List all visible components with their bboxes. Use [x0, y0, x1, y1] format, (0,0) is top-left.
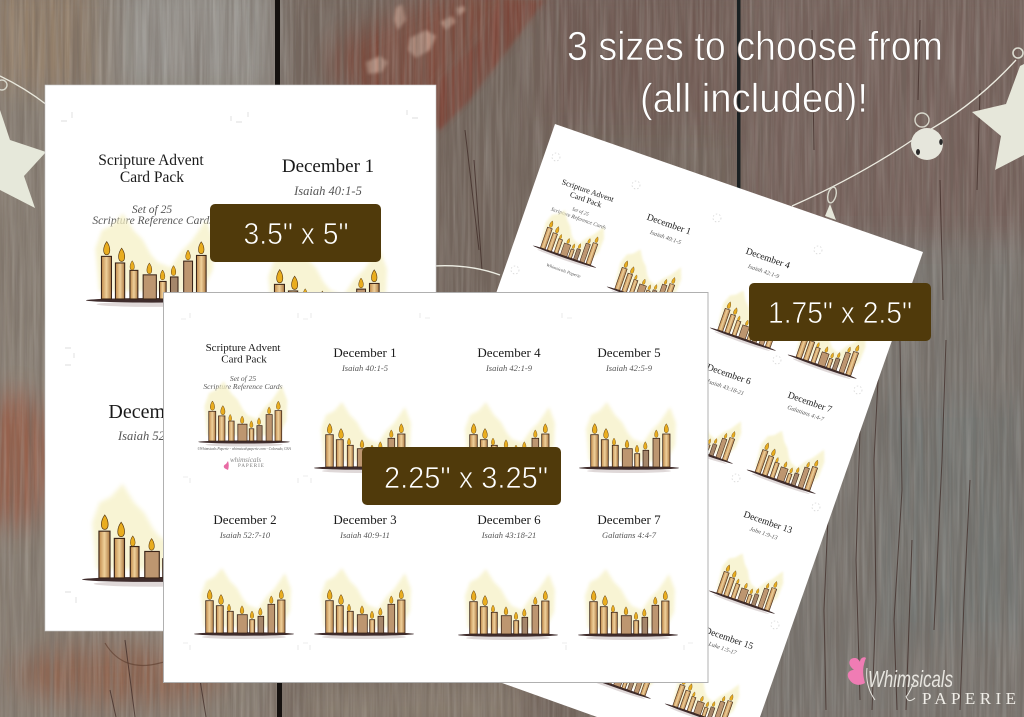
cover title: Scripture Advent: [206, 342, 280, 354]
rotated candle illustrations: [532, 204, 873, 717]
rotated cover text: Scripture Reference Cards: [550, 206, 607, 231]
scripture 2: Isaiah 52:7-10: [117, 429, 193, 443]
card labels row 2: December 3: [333, 512, 397, 527]
cover subtitle: Set of 25: [230, 374, 256, 383]
brand logo: Whimsicals: [868, 666, 953, 692]
brand logo: PAPERIE: [922, 689, 1016, 708]
size label: 3.5 x 5: [210, 204, 381, 262]
crop marks: [181, 313, 693, 650]
rotated card labels: Luke 1:5-17: [707, 641, 738, 657]
small logo: [224, 456, 265, 470]
card labels row 1: [333, 345, 661, 373]
title: 3 sizes to choose from: [567, 23, 943, 69]
rotated card labels: December 4: [744, 247, 791, 272]
card labels row 2: Isaiah 40:9-11: [339, 530, 390, 540]
cover title: Card Pack: [120, 169, 184, 186]
rotated cover text: Card Pack: [569, 190, 603, 209]
sheet: 2.25 x 3.25 inch cards: [164, 292, 708, 682]
candles cover: [86, 213, 218, 307]
card labels row 1: Isaiah 42:5-9: [605, 363, 653, 373]
candle illustrations: [194, 402, 679, 640]
card labels row 2: Galatians 4:4-7: [602, 530, 657, 540]
string and hanging ornaments: right: [792, 48, 1024, 220]
card labels row 2: December 2: [213, 512, 277, 527]
rotated card labels: December 1: [645, 213, 692, 238]
sheet: 1.75 x 2.5 inch cards (rotated): [376, 124, 923, 717]
cover subtitle: Set of 25: [132, 204, 172, 216]
small logo: whimsicals: [230, 456, 261, 464]
brand logo: [848, 657, 1016, 708]
rotated card labels: Isaiah 42:1-9: [746, 263, 780, 280]
rotated card labels: December 15: [703, 626, 755, 652]
card labels row 1: Isaiah 40:1-5: [341, 363, 388, 373]
rotated card labels: December 13: [742, 510, 794, 536]
card labels row 2: Isaiah 43:18-21: [481, 530, 536, 540]
rotated card labels: December 6: [705, 363, 752, 388]
card labels row 1: December 5: [597, 345, 661, 360]
rotated cover text: Scripture Advent: [561, 177, 616, 204]
rotated card labels: Isaiah 40:1-5: [648, 229, 682, 246]
candles cover: [198, 381, 290, 447]
candles december 1: [259, 241, 391, 335]
december 1 heading: December 1: [282, 156, 374, 177]
cover subtitle: Scripture Reference Cards: [203, 382, 283, 391]
rotated card labels: Galatians 4:4-7: [786, 404, 826, 423]
sheet: 3.5 x 5 inch cards: [45, 85, 436, 631]
rotated cover text: Whimsicals Paperie: [546, 262, 581, 279]
card labels row 1: Isaiah 42:1-9: [485, 363, 533, 373]
december 2 heading: December 2: [108, 401, 206, 423]
size label: 1.75 x 2.5: [749, 283, 931, 341]
card labels row 2: [213, 512, 661, 540]
crop marks: [61, 110, 418, 603]
cover title: Scripture Advent: [98, 152, 204, 169]
card labels row 1: December 4: [477, 345, 541, 360]
string and hanging ornaments: left: [0, 76, 47, 208]
size label: 3.5 x 5: 3.5" x 5": [244, 216, 348, 251]
rotated cover text: Set of 25: [571, 207, 590, 218]
cover title: Card Pack: [221, 354, 267, 366]
card labels row 2: December 7: [597, 512, 661, 527]
rotated card labels: Isaiah 43:18-21: [705, 378, 745, 397]
card labels row 1: December 1: [333, 345, 397, 360]
small logo: PAPERIE: [238, 464, 265, 469]
card labels row 2: December 6: [477, 512, 541, 527]
rotated card labels: [645, 213, 833, 657]
string between left and rotated sheets: [434, 266, 500, 275]
rotated card labels: December 7: [786, 391, 833, 416]
cover subtitle: Scripture Reference Cards: [92, 215, 214, 227]
size label: 1.75 x 2.5: 1.75" x 2.5": [768, 295, 912, 330]
rotated crop marks: [511, 153, 862, 629]
card labels row 2: Isaiah 52:7-10: [219, 530, 271, 540]
size label: 2.25 x 3.25: 2.25" x 3.25": [384, 460, 548, 495]
candles december 2: [82, 484, 227, 587]
icon: pink wing: [848, 657, 866, 685]
title: (all included)!: [640, 75, 868, 121]
copyright line: ©Whimsicals Paperie - whimsicalspaperie.com - Colorado, USA: [197, 446, 292, 452]
scripture 1: Isaiah 40:1-5: [293, 184, 362, 198]
title: [567, 23, 943, 121]
rotated card labels: John 1:9-13: [749, 526, 778, 542]
rotated cover text: [546, 177, 616, 279]
size label: 2.25 x 3.25: [362, 447, 561, 505]
